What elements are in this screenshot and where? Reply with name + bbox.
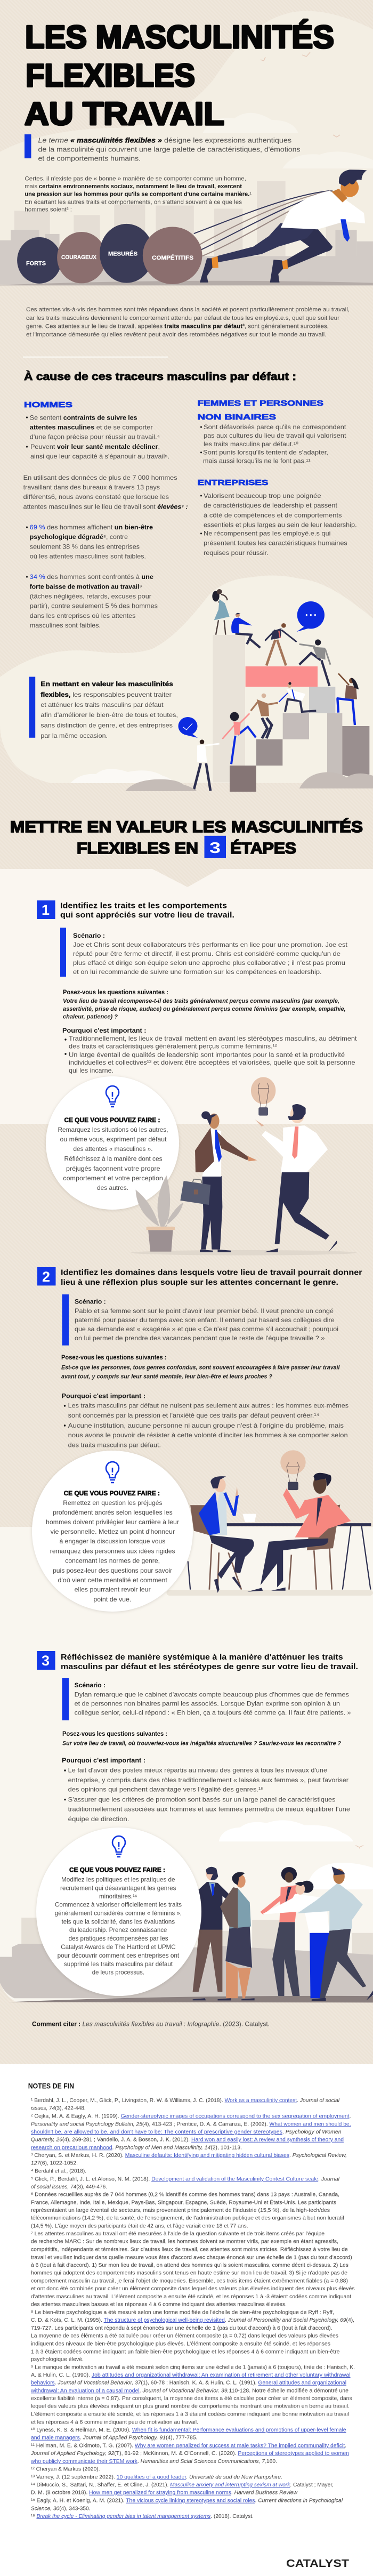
endnotes: A. & Hulin, C. L. (1990). Job attitudes and organizational withdrawal: An examination of retirement and other voluntary withdrawal xyxy=(31,2372,351,2378)
questions: Posez-vous les questions suivantes : xyxy=(62,1731,167,1737)
accent bar: callout xyxy=(29,677,35,738)
why it matters: des traits masculins par défaut. xyxy=(68,1441,161,1448)
endnotes: ¹ Berdahl, J. L., Cooper, M., Glick, P., Livingston, R. W. & Williams, J. C. (2018). Work as a masculinity contest . Journal of social xyxy=(31,2098,340,2104)
man xyxy=(200,170,367,283)
illustration: city skyline xyxy=(0,181,373,285)
person 5 xyxy=(297,1866,373,2001)
text: what you can do 2: Remettez en question les préjugés xyxy=(63,1500,163,1507)
panel: women and non-binary people: FEMMES ET PERSONNES xyxy=(197,399,323,408)
text: what you can do 1: ou même vous, expriment par défaut xyxy=(60,1136,167,1143)
text: what you can do 3: supprimé les traits masculins par défaut xyxy=(64,1961,173,1968)
stat: 34 %: dans les entreprises où les attentes xyxy=(30,613,136,619)
icon: bulb xyxy=(106,1086,119,1107)
stat: 34 %: partir), contre seulement 5 % des hommes xyxy=(30,602,158,609)
text: what you can do 2: profondément ancrés selon lesquelles les xyxy=(53,1509,173,1516)
callout: et atténuer les traits masculins par défaut xyxy=(40,702,164,709)
table xyxy=(188,1523,371,1590)
scenario: que sa demande est « exagérée » et que « Ce n'est pas comme s'il accouchait ; pourquoi xyxy=(75,1325,338,1333)
illustration: team and skyline xyxy=(0,1820,373,2002)
endnotes: who publicly communicate their STEM work . Humanities and Scial Sciences Communications, 7, 160. xyxy=(30,2459,277,2465)
text: what you can do 1: préjugés façonnent votre propre xyxy=(66,1165,160,1172)
callout: par la même occasion. xyxy=(40,732,108,739)
scenario: et de personnes non binaires parmi les associés. Lorsque Dylan exprime son opinion à un xyxy=(75,1700,340,1708)
body paragraph: En écartant les autres traits et comportements, on s'attend souvent à ce que les xyxy=(25,199,242,205)
person: leader xyxy=(265,623,297,665)
scenario: collègue senior, celui-ci répond : « Eh bien, ça a toujours été comme ça. Il faut être patients. » xyxy=(75,1709,351,1717)
left person xyxy=(199,1476,254,1593)
scenario: on lui permet de prendre des vacances pendant que le reste de l'équipe travaille ? » xyxy=(75,1334,325,1342)
heading: three steps: METTRE EN VALEUR LES MASCULINITÉS xyxy=(10,818,363,836)
why it matters: qui les incarne. xyxy=(69,1067,113,1074)
panel: companies: requises pour réussir. xyxy=(204,550,269,557)
panel: women and non-binary people: les traits masculins par défaut.¹⁰ xyxy=(204,441,298,448)
stat: 69 % xyxy=(26,524,153,560)
endnotes: de recherche MARC : Sur de nombreux lieux de travail, les hommes doivent se montrer virils, par exemple en étant agressifs, xyxy=(31,2239,338,2245)
ball labels: COMPÉTITIFS xyxy=(152,254,193,261)
why it matters: nous avons le pouvoir de résister à cette volonté d'inciter les hommes à se comporter selon xyxy=(68,1431,348,1439)
step heading xyxy=(60,901,234,920)
panel: companies: Valorisent beaucoup trop une poignée xyxy=(204,493,321,500)
icon: birds xyxy=(261,52,340,137)
scenario xyxy=(75,1681,351,1717)
bullets: men: ainsi que leur capacité à s'épanouir au travail⁵. xyxy=(30,453,169,460)
icon: idea bulb xyxy=(251,1077,275,1116)
ball: mesurés xyxy=(100,224,153,283)
text: what you can do 3: de leurs processus. xyxy=(92,1969,144,1976)
briefcase xyxy=(180,1179,210,1205)
text: what you can do 1: des autres. xyxy=(97,1185,128,1192)
why it matters: S'assurer que les critères de promotion sont basés sur un large panel de caractéristiques xyxy=(68,1796,335,1804)
ball labels: MESURÉS xyxy=(108,251,137,257)
person 3 xyxy=(262,1867,299,1996)
text: what you can do 2: puis posez-leur des questions pour savoir xyxy=(53,1567,172,1574)
endnotes: ⁹ Le manque de motivation au travail a été mesuré selon cinq items sur une échelle de 1 (jamais) à 6 (toujours), tirée de : Hanisch, K. xyxy=(31,2364,355,2370)
text: what you can do 3: généralement considérés comme « féminins », xyxy=(55,1910,182,1917)
why it matters: Le fait d'avoir des postes mieux répartis au niveau des genres à tous les niveaux d'une xyxy=(68,1767,327,1774)
why it matters: des opinions qui penchent davantage vers l'égalité des genres.¹⁵ xyxy=(68,1785,264,1793)
circle: what you can do 3 xyxy=(36,1828,201,1996)
endnotes: et les réponses 4 à 6 comme indiquant peu de motivation au travail. xyxy=(31,2419,198,2425)
accent bar: intro xyxy=(25,134,31,158)
endnotes: ² Cejka, M. A. & Eagly, A. H. (1999). Gender-stereotypic images of occupations correspond to the sex segregation of employment . xyxy=(31,2114,351,2120)
questions xyxy=(61,1355,340,1380)
accent bar xyxy=(60,928,66,977)
panel: companies: essentiels et plus larges au sein de leur leadership. xyxy=(204,521,357,528)
ball labels: COURAGEUX xyxy=(61,254,97,261)
stat: 34 % xyxy=(26,574,158,629)
why it matters: Un large éventail de qualités de leadership sont importantes pour la santé et la productivité xyxy=(69,1051,345,1059)
endnotes: indiquent des niveaux de bien-être psychologique plus élevés. L'élément composite a ensuite été scindé, et les réponses xyxy=(31,2341,330,2347)
scenario: plus effacé et dirige son équipe selon une approche plus collaborative ; il n'est pas promu xyxy=(73,959,345,967)
text: what you can do 3: pour découvrir comment ces entreprises ont xyxy=(58,1952,180,1959)
bullets: men: attentes masculines et de se comporter xyxy=(30,424,153,431)
callout: flexibles, les responsables peuvent traiter xyxy=(40,691,172,698)
why it matters: traditionnellement associées aux hommes et aux femmes permettra de mieux équilibrer l'une xyxy=(68,1806,350,1813)
intro definition: de la masculinité qui couvrent une large palette de caractéristiques, d'émotions xyxy=(38,146,301,154)
heading: three steps: 3 xyxy=(209,840,221,857)
scenario: Dylan remarque que le cabinet d'avocats compte beaucoup plus d'hommes que de femmes xyxy=(75,1690,349,1698)
why it matters: Traditionnellement, les lieux de travail mettent en avant les stéréotypes masculins, au détriment xyxy=(69,1035,357,1042)
endnotes: représentaient un large éventail de secteurs, mais provenaient principalement de l'industrie (15,5 %), de la high-tech/des xyxy=(31,2208,330,2213)
questions: avant tout, y compris sur leur santé mentale, leur bien-être et leurs proches ? xyxy=(61,1374,272,1380)
person: older man xyxy=(251,694,278,738)
panel: companies xyxy=(197,478,357,557)
stat: 69 %: 69 % des hommes affichent un bien-être xyxy=(30,524,153,531)
endnotes: and male managers . Journal of Applied Psychology, 91 (4), 777-785. xyxy=(31,2435,198,2441)
endnotes: hommes qui adoptent des comportements masculins sont tenus en haute estime sur mon lieu de travail. 3) Si je n'adopte pas de xyxy=(31,2271,347,2276)
text: what you can do 3: recrutement qui désavantagent les genres xyxy=(60,1885,176,1891)
step 2: Identifiez les domaines dans lesquels votre lieu de travail pourrait donner xyxy=(61,1268,362,1277)
text: what you can do 3: minoritaires.¹⁶ xyxy=(99,1893,137,1900)
step 3: Réfléchissez de manière systémique à la manière d'atténuer les traits xyxy=(61,1653,343,1662)
endnotes: (14,5 %). L'âge moyen des participants était de 42 ans, et l'âge variait entre 18 et 77 ans. xyxy=(31,2223,248,2229)
paragraph: default traits: et l'importance démesurée qu'elles revêtent peut avoir des retombées négatives sur tout le monde au travail. xyxy=(26,332,326,338)
endnotes: Quarterly, 26(4), 269-281 ; Vandello, J. A. & Bosson, J. K. (2012). Hard won and easily lost: A review and synthesis of theory and xyxy=(31,2137,344,2143)
ground xyxy=(166,1590,373,1596)
stat: 34 %: 34 % des hommes sont confrontés à une xyxy=(30,574,154,581)
paragraph: default traits: Ces attentes vis-à-vis des hommes sont très répandues dans la société et posent particulièrement problème au travail, xyxy=(26,307,350,313)
callout: En mettant en valeur les masculinités xyxy=(40,681,173,688)
callout: afin d'améliorer le bien-être de tous et toutes, xyxy=(40,712,178,719)
step heading: qui sont appréciés sur votre lieu de travail. xyxy=(60,911,234,920)
clouds xyxy=(219,1820,373,1889)
paragraph: default traits xyxy=(26,307,350,338)
endnotes: Science, 30(4), 343-350. xyxy=(31,2506,91,2511)
illustration: man pulling weights xyxy=(17,170,367,284)
why it matters: Les traits masculins par défaut ne nuisent pas seulement aux autres : les hommes eux-mêmes xyxy=(68,1402,348,1409)
questions xyxy=(63,989,346,1020)
step 1 xyxy=(37,900,357,1074)
text: what you can do 2: hommes doivent privilégier leur carrière à leur xyxy=(46,1519,179,1526)
stat: 69 %: où les attentes masculines sont faibles. xyxy=(30,553,146,560)
text: what you can do 2: vie personnelle. Mettez un point d'honneur xyxy=(51,1528,175,1535)
endnotes: Journal of Applied Psychology, 92 (T), 81-92 ; McKinnon, M. & O'Connell, C. (2020). Perceptions of stereotypes applied to women xyxy=(30,2451,349,2457)
cup xyxy=(242,1514,256,1522)
ball labels xyxy=(26,251,193,267)
intro definition: Le terme « masculinités flexibles » désigne les expressions authentiques xyxy=(38,136,292,144)
endnotes: ¹⁴ DiMuccio, S., Sattari, N., Shaffer, E. et Cline, J. (2021). Masculine anxiety and interrupting sexism at work . Catalyst ; Mayer, xyxy=(31,2482,334,2488)
step 2: 2 xyxy=(42,1269,50,1285)
text: what you can do 2: d'où vient cette mentalité et comment xyxy=(58,1577,168,1584)
plant xyxy=(135,1176,183,1252)
body paragraph: mais certains environnements sociaux, notamment le lieu de travail, exercent xyxy=(25,183,242,190)
panel: men xyxy=(23,400,188,629)
illustration: two colleagues with idea xyxy=(131,1077,357,1255)
step 3: 3 xyxy=(42,1653,50,1669)
endnotes: ³ Cheryan, S. et Markus, H. R. (2020). Masculine defaults: Identifying and mitigating hidden cultural biases . Psychological Review, xyxy=(31,2153,347,2159)
text: what you can do 3: Modifiez les politiques et les pratiques de xyxy=(61,1876,175,1883)
person 1 xyxy=(190,1867,248,2000)
endnotes: shouldn't be, are allowed to be, and don't have to be: The contents of prescriptive gender stereotypes . Psychology of Women xyxy=(31,2129,342,2135)
text: what you can do 2: remarquez des personnes aux idées rigides xyxy=(50,1548,175,1555)
icon: speech bubble xyxy=(297,601,325,632)
scenario: Pablo et sa femme sont sur le point d'avoir leur premier bébé. Il veut prendre un congé xyxy=(75,1307,334,1315)
questions: Sur votre lieu de travail, où trouveriez-vous les inégalités structurelles ? Sauriez-vous les reconnaître ? xyxy=(62,1740,341,1746)
body paragraph xyxy=(25,176,252,213)
paragraph: default traits: car les traits masculins deviennent le comportement attendu par défaut de tous les employé.e.s, quel que soit leur xyxy=(26,315,339,321)
person: woman waving xyxy=(337,673,359,725)
endnotes heading: NOTES DE FIN xyxy=(28,2082,74,2090)
illustration: conversation at table xyxy=(166,1450,373,1596)
callout: sans distinction de genre, et des entreprises xyxy=(40,722,173,729)
text: what you can do 3 xyxy=(55,1867,182,1976)
text: what you can do 1: comportement et votre perception xyxy=(63,1175,163,1182)
icon: check bubble xyxy=(178,717,198,738)
text: what you can do 1: des attentes « masculines ». xyxy=(74,1146,152,1153)
endnotes: of social issues, 74(3), 449-476. xyxy=(31,2184,107,2190)
person: bottom man xyxy=(193,739,220,791)
endnotes: ⁸ Le bien-être psychologique a été mesuré selon une forme modifiée de l'échelle de bien-être psychologique de Ryff : Ryff, xyxy=(31,2309,334,2315)
panel: women and non-binary people: Sont défavorisés parce qu'ils ne correspondent xyxy=(204,424,346,431)
endnotes: research on precarious manhood . Psychology of Men and Masculinity, 14 (2), 101-113. xyxy=(31,2145,242,2151)
endnotes: ¹¹ Heilman, M. E. & Okimoto, T. G. (2007). Why are women penalized for success at male tasks? The implied communality deficit . xyxy=(31,2443,346,2449)
scenario: Scénario : xyxy=(75,1681,106,1689)
ball: compétitifs xyxy=(143,227,202,284)
endnotes: issues, 74(3), 422-448. xyxy=(31,2106,86,2111)
endnotes: psychologique élevé. xyxy=(31,2357,84,2363)
text: what you can do 3: CE QUE VOUS POUVEZ FAIRE : xyxy=(69,1867,165,1873)
questions: Posez-vous les questions suivantes : xyxy=(61,1355,166,1361)
scenario: et on lui recommande de suivre une formation sur les compétences en leadership. xyxy=(73,968,322,976)
text: what you can do 3: tels que la solidarité, dans les évaluations xyxy=(62,1919,175,1926)
scenario: Scénario : xyxy=(73,932,105,939)
questions: Votre lieu de travail récompense-t-il des traits généralement perçus comme masculins (par exemple, xyxy=(63,998,339,1004)
endnotes: C. D. & Kots, C. L. M. (1995). The structure of psychological well-being revisited . Journal of Personality and Social Psychology, 69 (4), xyxy=(31,2317,354,2323)
ball: courageux xyxy=(57,232,106,283)
callout xyxy=(40,681,178,739)
title: FLEXIBLES xyxy=(26,58,195,93)
endnotes: télécommunications (14,2 %), de la santé, de l'enseignement, de l'administration publique et des organismes à but non lucratif xyxy=(31,2216,344,2221)
step number xyxy=(37,900,55,919)
ball labels: FORTS xyxy=(26,260,46,267)
illustration: people climbing blocks xyxy=(193,589,373,792)
endnotes: withdrawal: An evaluation of a causal model . Journal of Vocational Behavior. 39, 110-128. Notre échelle modifiée a démontré une xyxy=(30,2388,348,2394)
text: what you can do 1: CE QUE VOUS POUVEZ FAIRE : xyxy=(64,1117,160,1124)
step 3: masculins par défaut et les stéréotypes de genre sur votre lieu de travail. xyxy=(61,1662,358,1671)
text: what you can do 3: du leadership. Prenez connaissance xyxy=(69,1927,167,1934)
endnotes: L'élément composite a ensuite été scindé, et les réponses 1 à 3 étaient codées comme indiquant une bonne motivation au travail xyxy=(31,2412,349,2418)
citation: Comment citer : Les masculinités flexibles au travail : Infographie. (2023). Catalyst. xyxy=(32,2020,270,2027)
step 2 xyxy=(37,1267,362,1448)
endnotes: D. M. (8 octobre 2018). How men get penalized for straying from masculine norms . Harvard Business Review xyxy=(31,2490,298,2496)
body paragraph: une pression sur les hommes pour qu'ils se comportent d'une certaine manière.¹ xyxy=(25,191,252,198)
person 2 xyxy=(217,1872,255,2000)
endnotes: à 6 (tout à fait d'accord). 1) Sur mon lieu de travail, on attend des hommes qu'ils soient masculins, comme décrit ci-dessus. 2) Les xyxy=(31,2263,348,2268)
panel: women and non-binary people: Sont punis lorsqu'ils tentent de s'adapter, xyxy=(203,449,328,456)
step 2: lieu à une réflexion plus souple sur les attentes concernant le genre. xyxy=(61,1278,338,1287)
paragraph: default traits: genre. Ces attentes sur le lieu de travail, appelées traits masculins par défaut³ , sont généralement surcotées, xyxy=(26,324,329,330)
logo: catalyst: CATALYST xyxy=(286,2558,349,2570)
why it matters: sont concernés par la pression et l'anxiété que ces traits par défaut peuvent créer.¹⁴ xyxy=(68,1412,319,1419)
bullets: men: Se sentent contraints de suivre les xyxy=(30,414,137,421)
panel: companies: ENTREPRISES xyxy=(197,478,269,487)
heading: three steps: ÉTAPES xyxy=(230,839,296,857)
stat: 34 %: (tâches négligées, retards, excuses pour xyxy=(30,593,151,600)
circle: what you can do 2 xyxy=(32,1451,193,1612)
person: woman in dress xyxy=(212,589,230,635)
text: what you can do 3: Catalyst Awards de The Hartford et UPMC xyxy=(61,1944,176,1951)
text: what you can do 2: point de vue. xyxy=(93,1596,131,1603)
panel: women and non-binary people: mais aussi lorsqu'ils ne le font pas.¹¹ xyxy=(203,457,311,465)
person: sitting man xyxy=(231,613,260,648)
subheading: hommes: HOMMES xyxy=(24,400,72,409)
endnotes: des attentes masculines basses et les réponses 4 à 6 comme indiquant des attentes masculines élevées. xyxy=(31,2302,287,2308)
bullets: men xyxy=(26,414,169,460)
endnotes: La moyenne de ces éléments a été calculée pour créer un élément composite (a = 0,72) dans lequel des valeurs plus élevées xyxy=(31,2333,338,2339)
stat: 34 %: masculines sont faibles. xyxy=(30,622,101,629)
scenario xyxy=(73,932,348,976)
endnotes: ¹² Cheryan & Markus (2020). xyxy=(31,2467,100,2473)
why it matters xyxy=(62,1027,357,1074)
bullets: men: d'une façon précise pour réussir au travail.⁴ xyxy=(30,434,160,441)
why it matters: Pourquoi c'est important : xyxy=(62,1757,145,1764)
text: survey: En utilisant des données de plus de 7 000 hommes xyxy=(23,474,177,481)
why it matters: des traits et caractéristiques généralement perçus comme féminins.¹² xyxy=(69,1043,277,1050)
title: LES MASCULINITÉS xyxy=(25,19,334,55)
endnotes: 1 à 3 étaient codées comme indiquant un faible bien-être psychologique et les réponses 4 à 6 comme indiquant un bien-être xyxy=(31,2349,340,2355)
text: what you can do 3: des pratiques récompensées par les xyxy=(69,1935,168,1942)
person: climber in grey xyxy=(299,639,330,686)
ball: forts xyxy=(17,237,61,284)
why it matters: individuelles et collectives¹³ et doivent être acceptées et valorisées, quelle que soit la personne xyxy=(69,1059,355,1066)
endnotes: ¹⁶ Break the cycle - Eliminating gender bias in talent management systems . (2018). Catalyst. xyxy=(31,2514,254,2519)
endnotes: behaviors. Journal of Vocational Behavior, 37 (1), 60-78 ; Hanisch, K. A. & Hulin, C. L. (1991). General attitudes and organizational xyxy=(31,2380,346,2386)
endnotes: Personality and social Psychology Bulletin, 25 (4), 413-423 ; Prentice, D. A. & Carranza, E. (2002). What women and men should be, xyxy=(31,2121,351,2127)
panel: companies: Ne récompensent pas les employé.e.s qui xyxy=(204,530,330,537)
endnotes: d'attentes masculines au travail. L'élément composite a ensuite été scindé, et les réponses 1 à -3 étaient codées comme indiquant xyxy=(31,2294,351,2300)
questions xyxy=(62,1731,341,1746)
endnotes: ¹⁰ Lyness, K. S. & Heilman, M. E. (2006). When fit is fundamental: Performance evaluations and promotions of upper-level female xyxy=(31,2427,346,2433)
questions: Posez-vous les questions suivantes : xyxy=(63,989,168,996)
text: what you can do 2: à engager la discussion lorsque vous xyxy=(60,1538,166,1545)
icon: bulb xyxy=(112,1836,125,1857)
panel: companies: à côté de compétences et de comportements xyxy=(204,512,342,519)
scenario xyxy=(75,1298,338,1342)
scenario: paternité pour passer du temps avec son enfant. Il entend par hasard ses collègues dire xyxy=(75,1316,335,1324)
chairs xyxy=(209,1544,332,1590)
why it matters: Pourquoi c'est important : xyxy=(62,1392,145,1400)
scenario: Scénario : xyxy=(75,1298,106,1306)
endnotes: ⁴ Berdahl et al., (2018). xyxy=(31,2168,86,2174)
endnotes: travail et veuillez indiquer dans quelle mesure vous êtes d'accord avec chaque énoncé sur une échelle de 1 (pas du tout d'accord) xyxy=(31,2255,352,2260)
why it matters: équipe de direction. xyxy=(68,1815,129,1823)
questions: chaleur, patience) ? xyxy=(63,1014,118,1020)
step number: 1 xyxy=(42,902,50,918)
why it matters xyxy=(62,1757,350,1823)
intro definition: et de comportements humains. xyxy=(38,155,141,163)
endnotes: France, Allemagne, Inde, Italie, Mexique, Pays-Bas, Singapour, Espagne, Suède, Royaume-Uni et États-Unis. Les participants xyxy=(31,2199,336,2205)
body paragraph: Certes, il n'existe pas de « bonne » manière de se comporter comme un homme, xyxy=(25,176,246,182)
bullets: men: Peuvent voir leur santé mentale décliner , xyxy=(30,444,160,450)
bushes xyxy=(125,779,197,791)
endnotes xyxy=(30,2098,355,2519)
endnotes: 719-727. Les participants ont répondu à sept énoncés sur une échelle de 1 (pas du tout d'accord) à 6 (tout à fait d'accord). xyxy=(31,2325,333,2331)
panel: women and non-binary people xyxy=(197,399,346,465)
scenario: Joe et Chris sont deux collaborateurs très performants en lice pour une promotion. Joe est xyxy=(73,941,348,948)
endnotes: ¹⁵ Eagly, A. H. et Koenig, A. M. (2021). The vicious cycle linking stereotypes and social roles . Current directions in Psychological xyxy=(31,2498,343,2504)
text: what you can do 1: Réfléchissez à la manière dont ces xyxy=(64,1156,163,1163)
endnotes: compétitifs, indépendants et téméraires. Sur d'autres lieux de travail, ces attentes sont moins strictes. Réfléchissez à votre lieu de xyxy=(31,2247,348,2253)
endnotes: excellente fiabilité interne (a = 0,87). Par conséquent, la moyenne des items a été calculée pour créer un élément composite, dans xyxy=(31,2396,352,2402)
person: kneeling xyxy=(279,682,316,712)
stat: 69 %: seulement 38 % dans les entreprises xyxy=(30,544,140,551)
text: survey: attentes masculines sur le lieu de travail sont élevées⁷ : xyxy=(23,504,188,511)
panel: women and non-binary people: NON BINAIRES xyxy=(197,413,276,422)
panel: companies: présentent toutes les caractéristiques humaines xyxy=(204,540,347,547)
right person xyxy=(247,1473,351,1592)
scenario: réputé pour être ferme et directif, il est promu. Chris est considéré comme quelqu'un de xyxy=(73,950,340,957)
why it matters: Aucune institution, aucune personne ni aucun groupe n'est à l'origine du problème, mais xyxy=(68,1422,344,1429)
skyline xyxy=(21,1918,373,1976)
text: what you can do 2: elles pourraient revoir leur xyxy=(75,1587,151,1593)
body paragraph: hommes soient² : xyxy=(25,207,72,213)
text: what you can do 3: Commencez à valoriser officiellement les traits xyxy=(55,1902,182,1909)
text: what you can do 2: CE QUE VOUS POUVEZ FAIRE : xyxy=(64,1491,160,1497)
ground xyxy=(131,1250,357,1255)
why it matters: entreprise, y compris dans des rôles traditionnellement « laissés aux femmes », peut favoriser xyxy=(68,1776,348,1784)
text: survey xyxy=(23,474,188,511)
endnotes: 127(6), 1022-1052. xyxy=(31,2161,78,2167)
step 3 xyxy=(37,1651,358,1823)
endnotes: lequel des valeurs plus élevées indiquent un plus grand nombre de comportements montrant une motivation en berne au travail. xyxy=(31,2404,350,2410)
stat: 34 %: forte baisse de motivation au travail ⁹ xyxy=(30,584,142,591)
person: afro xyxy=(222,712,256,764)
panel: women and non-binary people: pas aux cultures du lieu de travail qui valorisent xyxy=(204,432,346,439)
heading: three steps: FLEXIBLES EN xyxy=(77,840,198,857)
step heading: Identifiez les traits et les comportements xyxy=(60,901,227,911)
panel: companies: de caractéristiques de leadership et passent xyxy=(204,502,338,509)
endnotes: et ont donc été combinés pour créer un élément composite dans lequel des valeurs plus élevées indiquent des niveaux plus élevés xyxy=(31,2286,355,2292)
icon: bulb xyxy=(106,1462,119,1483)
text: what you can do 1: Remarquez les situations où les autres, xyxy=(58,1126,168,1133)
endnotes: comportement masculin au travail, je ferai l'objet de moqueries. Ensemble, ces trois items étaient extrêmement fiables (a = 0,88) xyxy=(31,2278,348,2284)
circle: what you can do 1 xyxy=(46,1076,179,1210)
text: what you can do 2 xyxy=(46,1491,179,1603)
heading: three steps xyxy=(10,818,363,858)
heading: because of masculine defaults: À cause de ces traceurs masculins par défaut : xyxy=(24,371,296,383)
stat: 69 %: psychologique dégradé ⁸, contre xyxy=(30,534,128,541)
icon: idea bulb xyxy=(280,1450,306,1490)
text: what you can do 2: concernant les normes de genre, xyxy=(65,1557,160,1564)
title: AU TRAVAIL xyxy=(25,96,224,132)
man xyxy=(255,1104,337,1252)
person 4 xyxy=(262,1881,329,1998)
woman with briefcase xyxy=(180,1111,257,1252)
why it matters xyxy=(62,1392,348,1448)
ropes xyxy=(194,191,333,256)
endnotes: ⁵ Glick, P., Berdahl, J. L. et Alonso, N. M. (2018). Development and validation of the Masculinity Contest Culture scale . Journal xyxy=(31,2176,340,2182)
questions: Est-ce que les personnes, tous genres confondus, sont souvent encouragées à faire passer leur travail xyxy=(61,1365,340,1371)
questions: assertivité, prise de risque, audace) ou généralement perçus comme féminins (par exemple, empathie, xyxy=(63,1006,346,1012)
endnotes: ⁶ Données recueillies auprès de 7 044 hommes (0,2 % identifiés comme des hommes trans) dans 13 pays : Australie, Canada, xyxy=(31,2192,339,2198)
text: what you can do 1 xyxy=(58,1117,168,1192)
why it matters: Pourquoi c'est important : xyxy=(62,1027,146,1034)
text: survey: travaillant dans des bureaux à travers 13 pays xyxy=(23,484,160,491)
intro definition xyxy=(38,136,301,163)
endnotes: ¹³ Varney, J. (12 septembre 2022). 10 qualities of a good leader . Université du sud du New Hampshire. xyxy=(31,2474,282,2480)
text: survey: différents6, nous avons constaté que lorsque les xyxy=(23,494,169,501)
endnotes: ⁷ Les attentes masculines au travail ont été mesurées à l'aide de la question suivante et de trois items créés par l'équipe xyxy=(31,2231,325,2237)
title xyxy=(25,19,334,132)
